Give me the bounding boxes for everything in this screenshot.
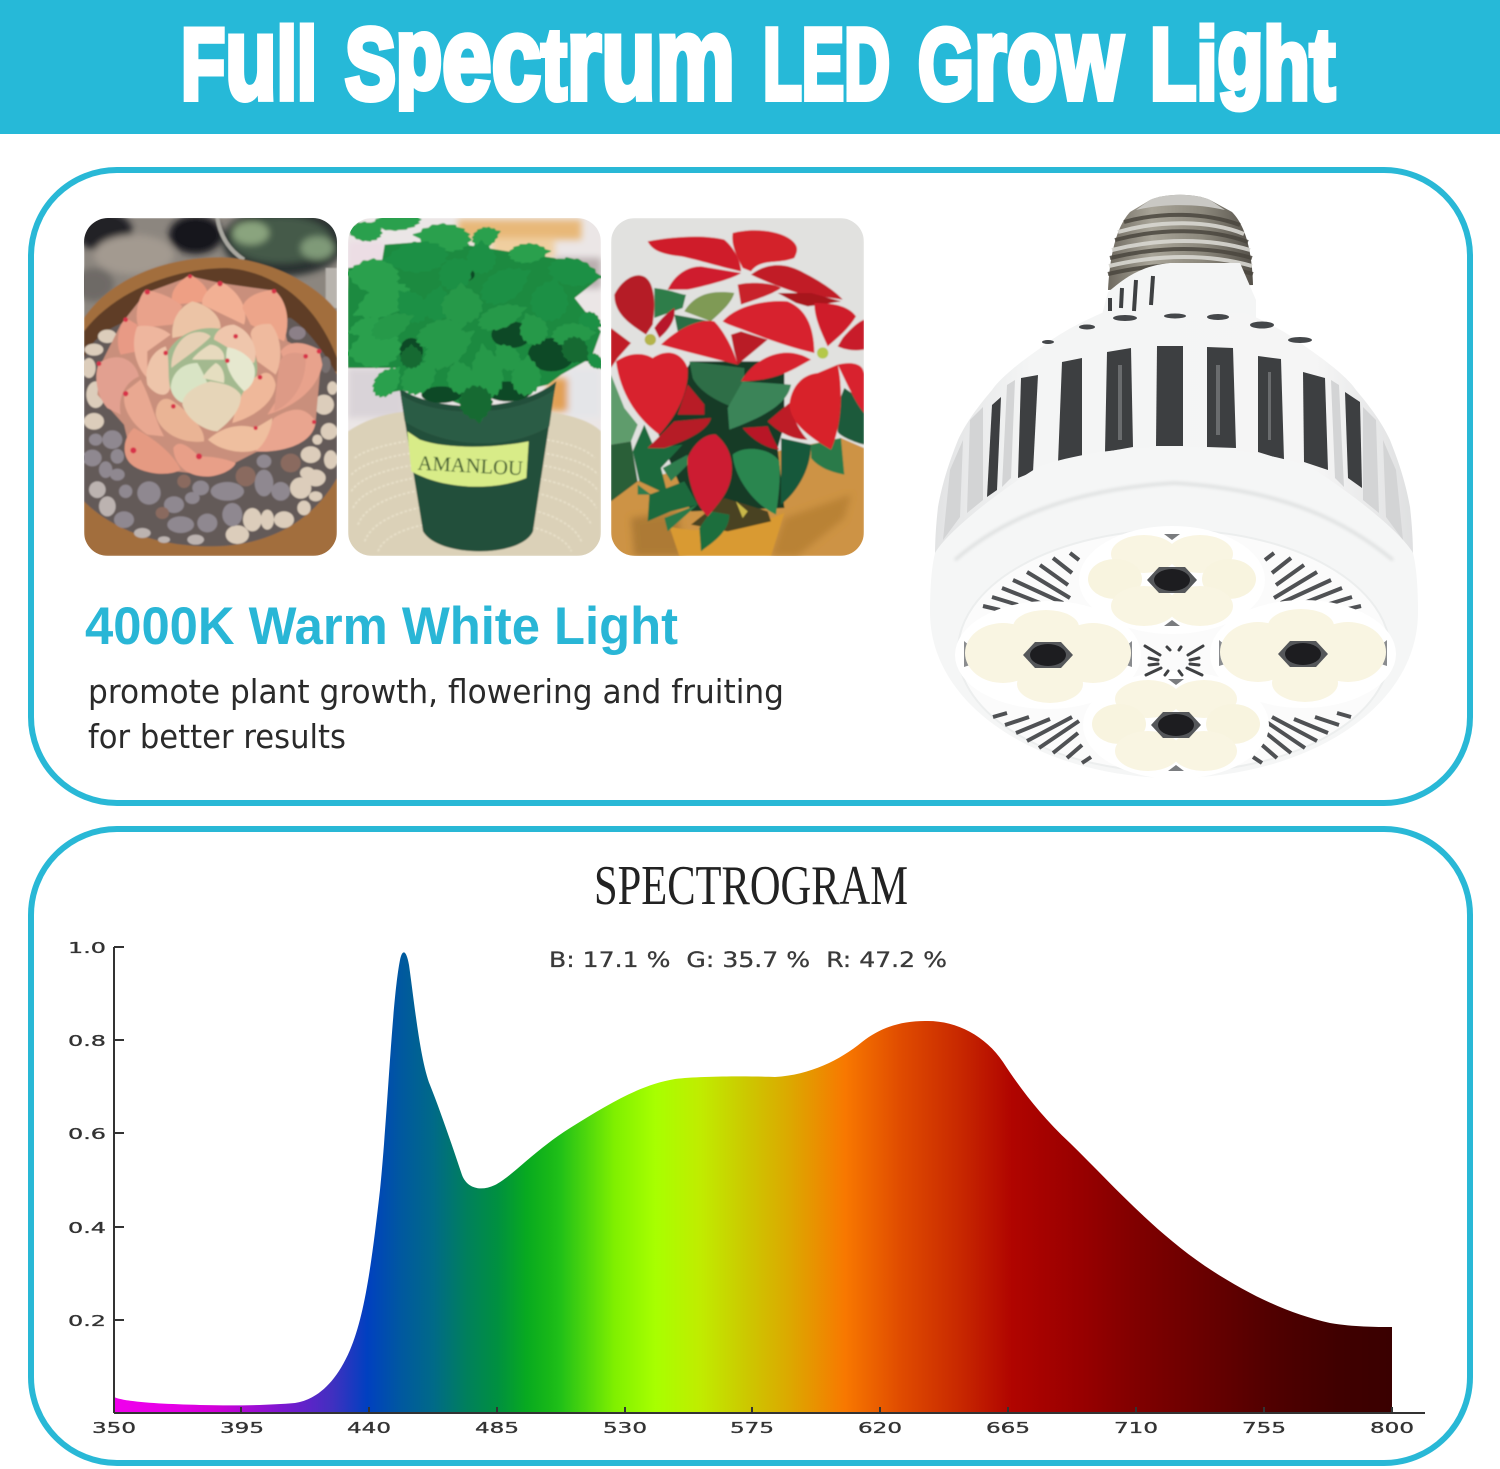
title [181,0,1335,125]
photo: green potted plant [344,211,606,556]
title: ht [1263,9,1335,121]
lower right vent [1253,713,1351,763]
bulb ring [930,447,1418,778]
lower left vent [993,713,1091,763]
y axis labels: 0.2 [68,1312,106,1330]
x axis labels: 485 [475,1419,519,1437]
panel: product overview [31,170,1470,803]
x axis labels: 575 [730,1419,774,1437]
color ratio legend: B: 17.1 % G: 35.7 % R: 47.2 % [549,948,947,972]
bulb body slots [987,346,1362,497]
header banner [0,0,1500,134]
x axis labels [92,1419,1414,1437]
LED cluster: top [1079,526,1265,634]
description text [88,672,784,756]
panel: spectrogram [31,829,1470,1463]
x axis labels: 800 [1370,1419,1414,1437]
LED cluster: left [955,601,1141,709]
bulb side ribs [943,380,1403,540]
upper right vent [1265,553,1361,610]
x axis labels: 395 [220,1419,264,1437]
photo: red poinsettia [611,218,864,556]
bulb top vents [1042,314,1312,344]
subheading: 4000K Warm White Light [85,597,678,656]
icon: LED bulb [930,195,1418,779]
x axis labels: 530 [603,1419,647,1437]
photo: succulent [74,206,346,556]
bulb neck [1100,263,1256,322]
title: LED [763,9,890,121]
y axis labels: 0.8 [68,1032,106,1050]
y axis labels: 0.4 [68,1219,106,1237]
y axis labels: 1.0 [68,939,106,957]
pot label: AMANLOU [417,453,523,480]
x axis labels: 620 [858,1419,902,1437]
title: p [396,0,442,110]
bulb body [935,313,1413,556]
x axis labels: 755 [1242,1419,1286,1437]
y axis labels: 0.6 [68,1125,106,1143]
title: Li [1150,9,1240,121]
LED cluster: right [1210,600,1396,708]
upper left vent [983,553,1079,610]
spectrum chart [68,939,1425,1437]
bulb screw base [1108,195,1253,290]
axes [114,947,1425,1413]
spectrum area [114,952,1392,1413]
description text: for better results [88,717,346,756]
center vent [1145,646,1203,675]
title: g [1217,0,1263,110]
title: S [345,9,412,121]
chart title: SPECTROGRAM [594,855,908,917]
bulb LED face [958,530,1390,772]
y axis labels [68,939,106,1330]
description text: promote plant growth, flowering and fruiting [88,672,784,711]
x axis labels: 710 [1114,1419,1158,1437]
x axis labels: 350 [92,1419,136,1437]
LED cluster: bottom [1083,671,1269,779]
x axis labels: 665 [986,1419,1030,1437]
x axis labels: 440 [347,1419,391,1437]
